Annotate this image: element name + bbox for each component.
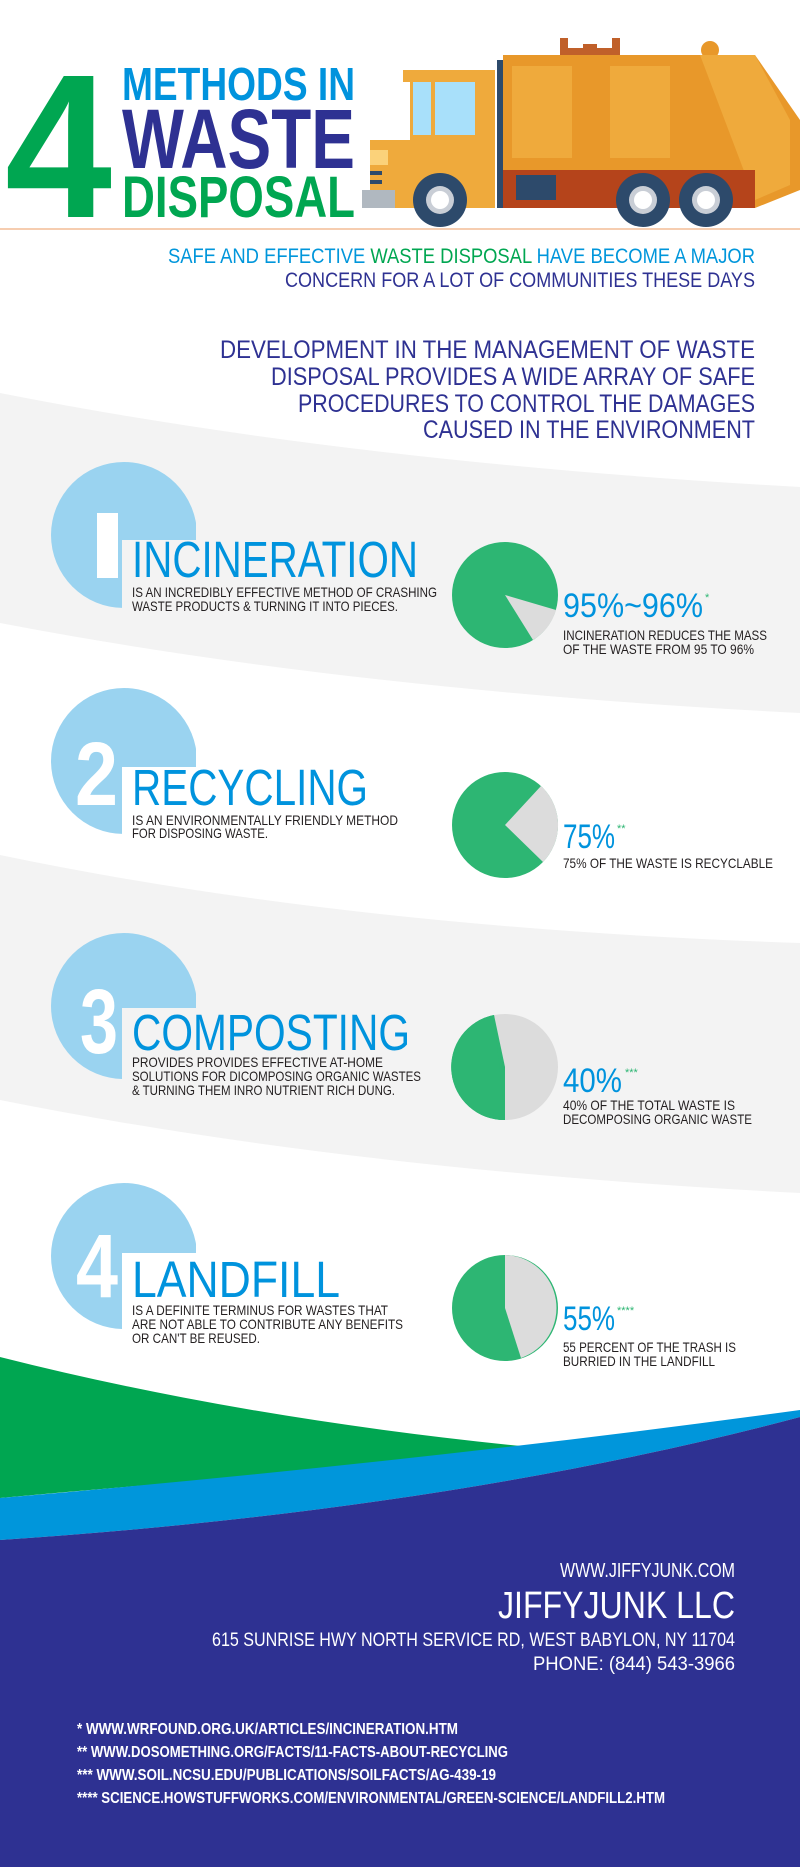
stat 40%: 40% <box>563 1062 622 1100</box>
number badge 1 <box>51 462 197 608</box>
description 4: IS A DEFINITE TERMINUS FOR WASTES THAT <box>132 1302 388 1318</box>
footer waves <box>0 1357 800 1867</box>
pie chart 95% <box>452 542 558 648</box>
number badge 2 <box>51 688 197 834</box>
stat 40% <box>563 1062 752 1127</box>
stat 95%~96%: OF THE WASTE FROM 95 TO 96% <box>563 641 754 657</box>
description 2 <box>132 812 398 841</box>
stat 55%: 55 PERCENT OF THE TRASH IS <box>563 1339 736 1355</box>
company contact: WWW.JIFFYJUNK.COM <box>560 1560 735 1582</box>
subtitle <box>168 245 755 292</box>
heading: landfill: LANDFILL <box>132 1251 340 1308</box>
background band 2 <box>0 855 800 1193</box>
title: DISPOSAL <box>122 165 355 230</box>
pie chart 75% <box>452 772 558 878</box>
footnote sources: *** WWW.SOIL.NCSU.EDU/PUBLICATIONS/SOILFACTS/AG-439-19 <box>77 1767 496 1784</box>
stat 75%: 75% <box>563 818 615 856</box>
stat 55%: 55% <box>563 1300 615 1338</box>
description 3: & TURNING THEM INRO NUTRIENT RICH DUNG. <box>132 1082 395 1098</box>
stat 55%: **** <box>617 1305 635 1317</box>
description 4: OR CAN'T BE REUSED. <box>132 1330 260 1346</box>
number badge 4 <box>51 1183 197 1329</box>
company contact: PHONE: (844) 543-3966 <box>533 1654 735 1675</box>
footnote sources: ** WWW.DOSOMETHING.ORG/FACTS/11-FACTS-ABOUT-RECYCLING <box>77 1744 508 1761</box>
description 2: IS AN ENVIRONMENTALLY FRIENDLY METHOD <box>132 812 398 828</box>
description 3: PROVIDES PROVIDES EFFECTIVE AT-HOME <box>132 1054 383 1070</box>
description 1 <box>132 584 437 614</box>
company contact <box>212 1560 735 1675</box>
description 4 <box>132 1302 403 1346</box>
title: 4 <box>5 32 112 261</box>
title: METHODS IN <box>122 58 355 110</box>
stat 75% <box>563 818 773 871</box>
stat 40%: DECOMPOSING ORGANIC WASTE <box>563 1111 752 1127</box>
heading: recycling: RECYCLING <box>132 759 368 816</box>
number badge 4: 4 <box>76 1217 118 1317</box>
footnote sources <box>77 1721 665 1807</box>
intro paragraph: CAUSED IN THE ENVIRONMENT <box>423 416 755 444</box>
section 3: composting <box>51 933 752 1127</box>
stat 95%~96%: 95%~96% <box>563 587 703 625</box>
pie chart 40% <box>451 1014 558 1120</box>
footnote sources: * WWW.WRFOUND.ORG.UK/ARTICLES/INCINERATION.HTM <box>77 1721 458 1738</box>
intro paragraph <box>220 336 755 444</box>
pie chart 55% <box>452 1255 558 1361</box>
stat 95%~96% <box>563 587 767 657</box>
description 1: WASTE PRODUCTS & TURNING IT INTO PIECES. <box>132 598 398 614</box>
stat 55%: BURRIED IN THE LANDFILL <box>563 1353 715 1369</box>
title: WASTE <box>122 92 355 186</box>
number badge 3: 3 <box>80 971 118 1073</box>
stat 40%: 40% OF THE TOTAL WASTE IS <box>563 1097 735 1113</box>
heading: composting: COMPOSTING <box>132 1004 410 1061</box>
subtitle: SAFE AND EFFECTIVE WASTE DISPOSAL HAVE BECOME A MAJOR <box>168 245 755 268</box>
description 1: IS AN INCREDIBLY EFFECTIVE METHOD OF CRASHING <box>132 584 437 600</box>
stat 95%~96%: * <box>705 592 710 604</box>
stat 40%: *** <box>625 1067 639 1079</box>
description 3 <box>132 1054 421 1098</box>
description 3: SOLUTIONS FOR DICOMPOSING ORGANIC WASTES <box>132 1068 421 1084</box>
section 1: incineration <box>51 462 767 657</box>
stat 55% <box>563 1300 736 1369</box>
company contact: JIFFYJUNK LLC <box>498 1585 735 1627</box>
number badge 2: 2 <box>75 725 118 825</box>
garbage truck illustration <box>362 38 800 227</box>
footnote sources: **** SCIENCE.HOWSTUFFWORKS.COM/ENVIRONMENTAL/GREEN-SCIENCE/LANDFILL2.HTM <box>77 1790 665 1807</box>
section 4: landfill <box>51 1183 736 1369</box>
section 2: recycling <box>51 688 773 878</box>
title <box>5 32 355 261</box>
description 2: FOR DISPOSING WASTE. <box>132 825 268 841</box>
description 4: ARE NOT ABLE TO CONTRIBUTE ANY BENEFITS <box>132 1316 403 1332</box>
heading: incineration: INCINERATION <box>132 531 418 588</box>
background band 1 <box>0 393 800 713</box>
stat 75%: ** <box>617 823 626 835</box>
number badge 3 <box>51 933 197 1079</box>
